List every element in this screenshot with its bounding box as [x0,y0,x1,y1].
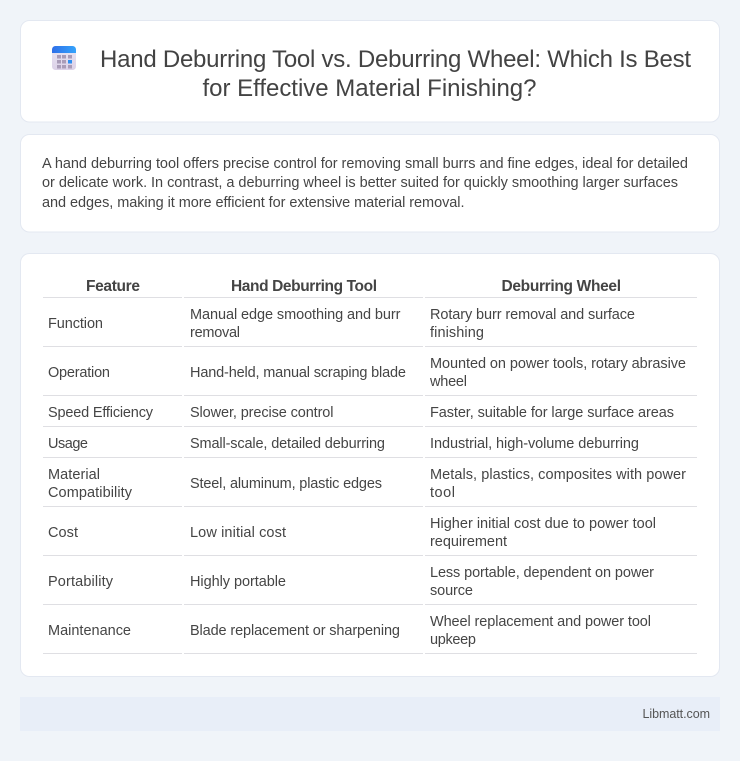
row: maintenance: Maintenance [48,623,131,639]
panel: title card [20,20,720,122]
row: material compatibility: Compatibility [48,485,133,501]
row: material compatibility: Material [48,467,100,483]
row: material compatibility: tool [430,485,455,501]
row: usage: Usage [48,436,88,452]
heading: for Effective Material Finishing? [202,75,536,102]
row: operation [48,356,686,390]
icon: calendar [52,46,76,70]
row: function: Rotary burr removal and surface [430,307,635,323]
row: cost [48,516,656,550]
row: cost: Low initial cost [190,525,286,541]
row: function: removal [190,325,240,341]
row: cost: requirement [430,534,507,550]
panel: intro text [20,134,720,232]
intro paragraph: or delicate work. In contrast, a deburring wheel is better suited for quickly smoothing larger surfaces [42,175,678,191]
row: function: Manual edge smoothing and burr [190,307,401,323]
intro paragraph [42,156,688,211]
row: usage: Small-scale, detailed deburring [190,436,385,452]
row: speed efficiency: Speed Efficiency [48,405,154,421]
row: operation: Operation [48,365,110,381]
row: operation: Hand-held, manual scraping blade [190,365,406,381]
footer bar [20,697,720,731]
row: portability: Less portable, dependent on power [430,565,654,581]
row: cost: Higher initial cost due to power tool [430,516,656,532]
row: material compatibility: Steel, aluminum, plastic edges [190,476,382,492]
table rules [43,297,697,654]
footer credit: Libmatt.com [642,707,710,721]
row: portability: Highly portable [190,574,286,590]
row: material compatibility [48,467,686,501]
row: maintenance: upkeep [430,632,476,648]
row: speed efficiency: Slower, precise control [190,405,334,421]
row: material compatibility: Metals, plastics, composites with power [430,467,686,483]
row: speed efficiency [48,405,674,421]
table header: Deburring Wheel [502,278,621,295]
row: operation: wheel [429,374,467,390]
row: portability [48,565,654,599]
row: function: Function [48,316,103,332]
row: usage [48,436,639,452]
row: usage: Industrial, high-volume deburring [430,436,639,452]
row: maintenance [48,614,651,648]
table header: Feature [86,278,140,295]
heading: Hand Deburring Tool vs. Deburring Wheel: Which Is Best [100,46,691,73]
heading [100,46,691,102]
row: speed efficiency: Faster, suitable for large surface areas [430,405,674,421]
row: operation: Mounted on power tools, rotary abrasive [430,356,686,372]
row: function [48,307,635,341]
row: function: finishing [430,325,484,341]
intro paragraph: and edges, making it more efficient for extensive material removal. [42,195,464,211]
row: cost: Cost [48,525,78,541]
row: portability: source [430,583,473,599]
intro paragraph: A hand deburring tool offers precise control for removing small burrs and fine edges, ideal for detailed [42,156,688,172]
panel: comparison table [20,254,720,676]
row: portability: Portability [48,574,114,590]
row: maintenance: Wheel replacement and power tool [430,614,651,630]
row: maintenance: Blade replacement or sharpening [190,623,400,639]
table header: Hand Deburring Tool [231,278,377,295]
table header [86,278,621,295]
